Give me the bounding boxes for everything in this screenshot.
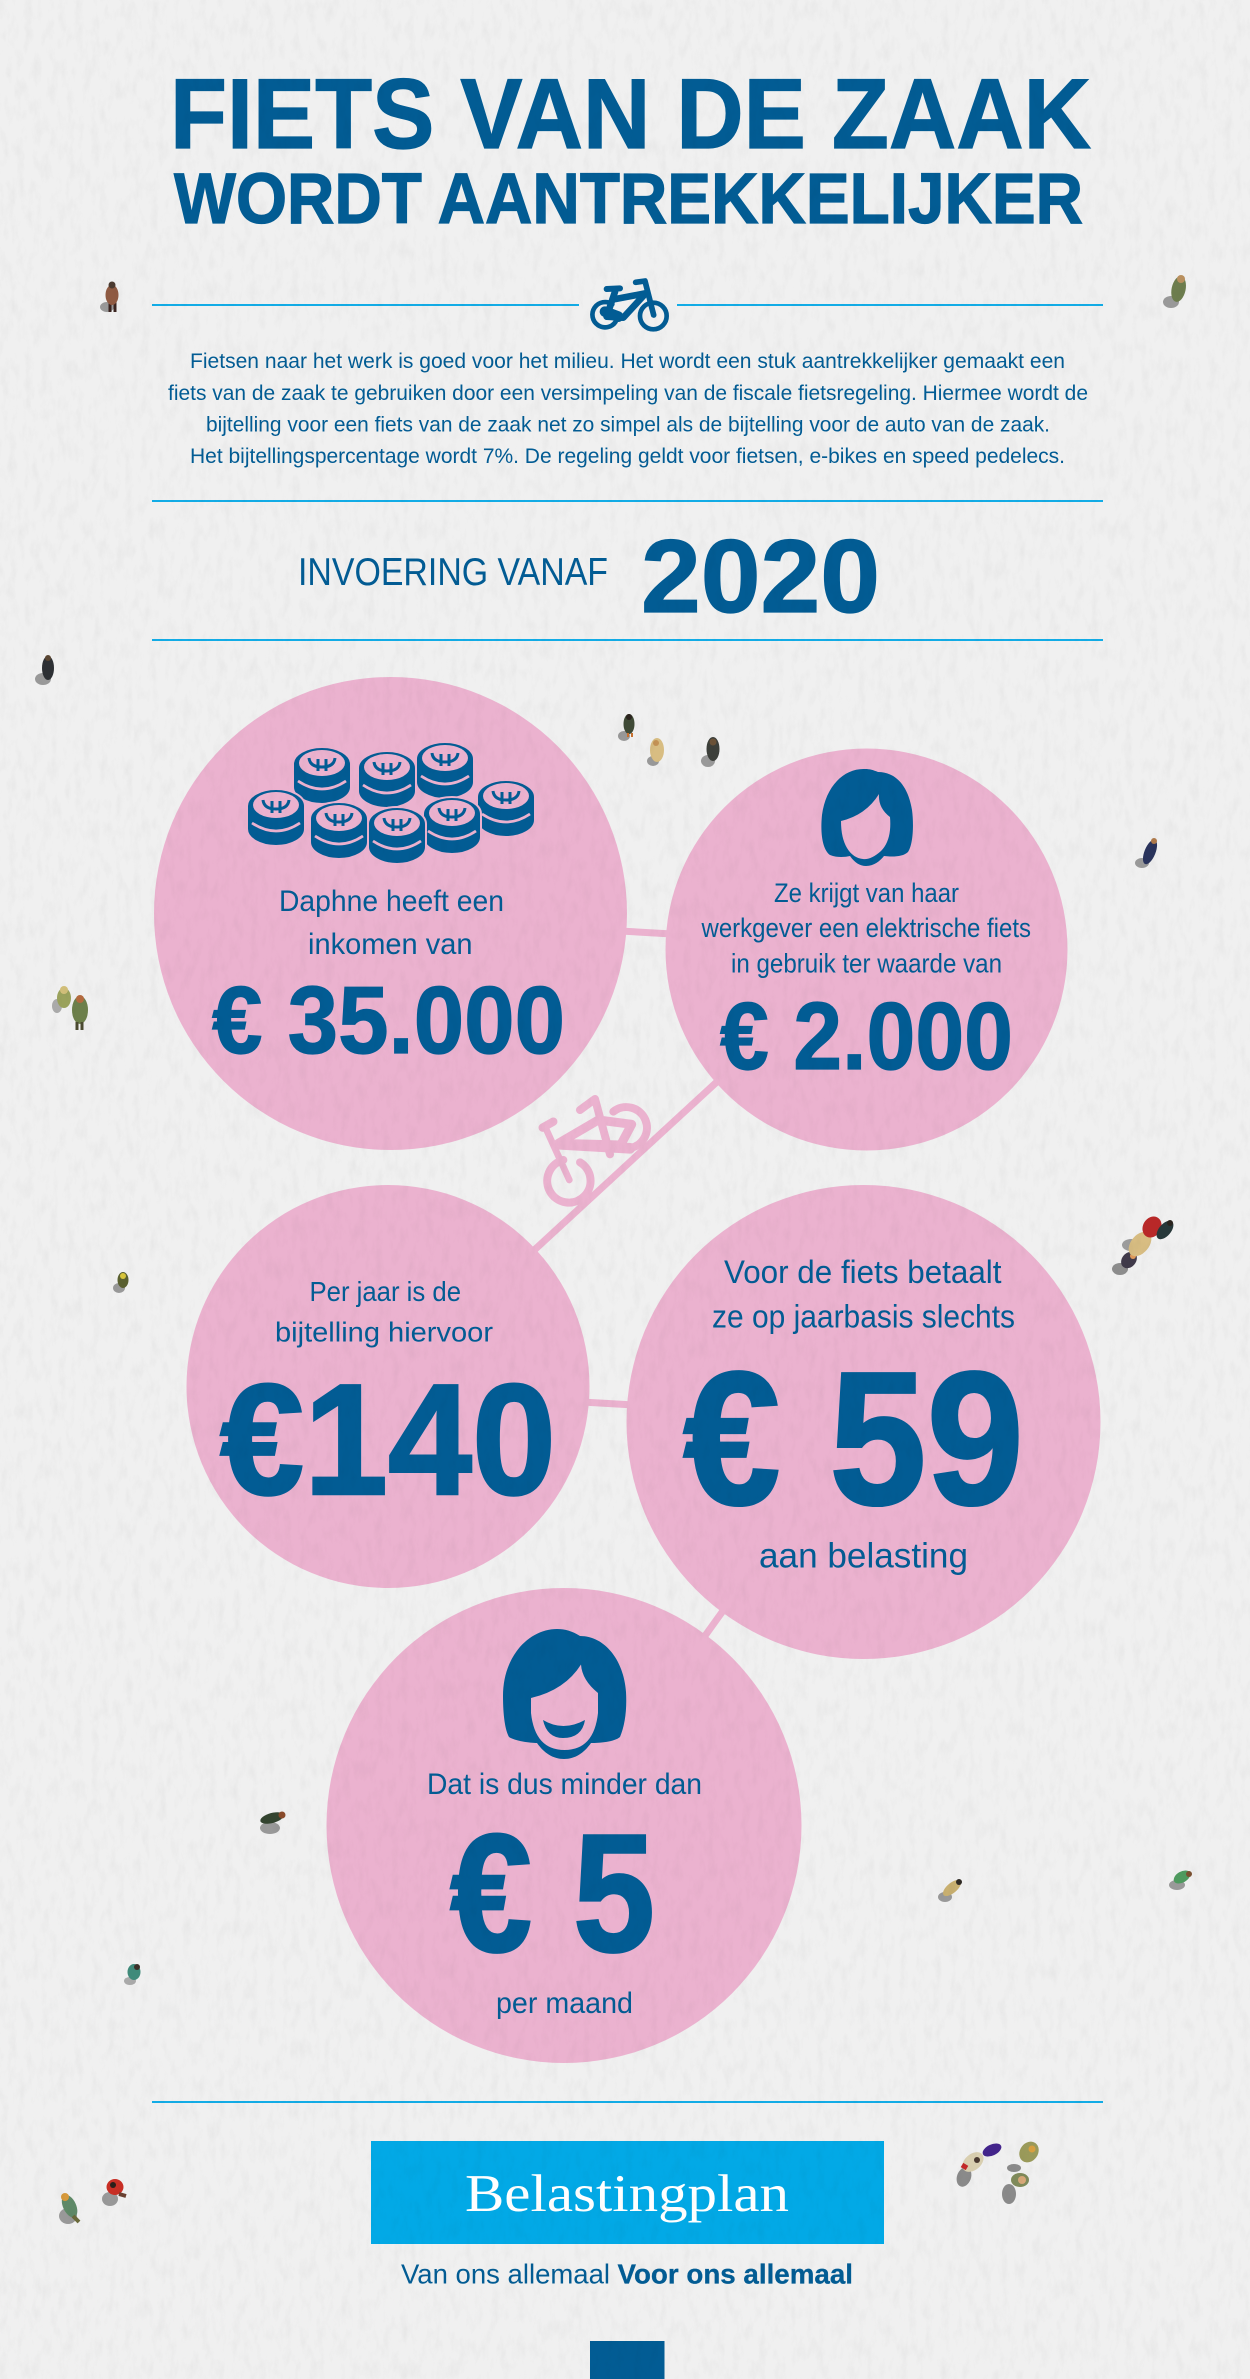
connector: income to bike value [620,931,672,934]
panel: per month [326,1588,802,2063]
tax label [712,1254,1015,1334]
panel: tax per year [626,1185,1100,1659]
intro text: Het bijtellingspercentage wordt 7%. De regeling geldt voor fietsen, e-bikes en speed pedelecs. [190,445,1065,468]
person [1163,275,1188,308]
person [938,1877,964,1902]
people pair [1002,2138,1043,2204]
person [113,1272,128,1293]
intro text: Fietsen naar het werk is goed voor het milieu. Het wordt een stuk aantrekkelijker gemaakt een [190,350,1065,373]
addition label: bijtelling hiervoor [275,1316,493,1348]
slogan: Van ons allemaal [401,2258,610,2290]
addition label: Per jaar is de [310,1276,461,1307]
bike value label: Ze krijgt van haar [774,878,959,908]
invoering 2020 [298,519,880,635]
intro text [168,350,1088,468]
person [259,1810,286,1834]
person [647,738,664,766]
bike value amount: € 2.000 [720,983,1013,1090]
panel: bike value [666,748,1068,1150]
invoering 2020: INVOERING VANAF [298,551,608,594]
slogan [401,2258,853,2290]
top divider with bike icon [152,281,1103,329]
person [1169,1868,1193,1890]
income amount: € 35.000 [212,967,565,1074]
person [59,2192,81,2224]
connector: addition to tax [582,1402,634,1405]
person [100,282,118,312]
rule above year [152,500,1103,502]
connector: diagonal road [530,1079,720,1254]
bike value label: werkgever een elektrische fiets [701,913,1031,943]
month label: Dat is dus minder dan [427,1768,702,1801]
panel: income [154,677,627,1150]
title: WORDT AANTREKKELIJKER [174,160,1083,239]
icon: woman smiling [503,1629,626,1759]
bike value label [701,878,1031,978]
month sublabel: per maand [496,1987,633,2020]
person [124,1964,140,1985]
slogan: Voor ons allemaal [618,2258,853,2290]
icon: bicycle [592,281,667,329]
month amount: € 5 [450,1799,655,1987]
person [618,714,634,741]
income label [279,885,504,961]
intro text: bijtelling voor een fiets van de zaak net zo simpel als de bijtelling voor de auto van de zaak. [206,414,1050,436]
title: FIETS VAN DE ZAAK [170,58,1091,169]
footer button: Belastingplan: Belastingplan [465,2165,789,2223]
footer button: Belastingplan [371,2141,884,2244]
person [102,2179,126,2206]
tax sublabel: aan belasting [759,1536,968,1576]
panel: yearly addition [186,1185,590,1588]
tax label: Voor de fiets betaalt [724,1254,1002,1290]
icon: woman neutral [821,769,913,866]
rule below year [152,639,1103,641]
income label: inkomen van [308,928,472,961]
title [170,58,1091,239]
addition amount: €140 [220,1352,556,1528]
person [35,655,54,685]
person [701,737,720,767]
bottom square logo [590,2341,664,2379]
people group [1112,1213,1177,1275]
bike value label: in gebruik ter waarde van [731,948,1002,978]
addition label [275,1276,493,1348]
person [1135,838,1160,868]
people pair [954,2141,1003,2189]
icon: stacks of euro coins [247,742,535,864]
intro text: fiets van de zaak te gebruiken door een versimpeling van de fiscale fietsregeling. Hiermee wordt de [168,382,1088,405]
invoering 2020: 2020 [641,519,880,635]
tax amount: € 59 [683,1333,1024,1545]
tax label: ze op jaarbasis slechts [712,1298,1015,1334]
rule above footer [152,2101,1103,2103]
income label: Daphne heeft een [279,885,504,918]
icon: pink bicycle on road [543,1099,647,1203]
people pair [52,986,88,1030]
connector: tax to month [702,1608,725,1640]
